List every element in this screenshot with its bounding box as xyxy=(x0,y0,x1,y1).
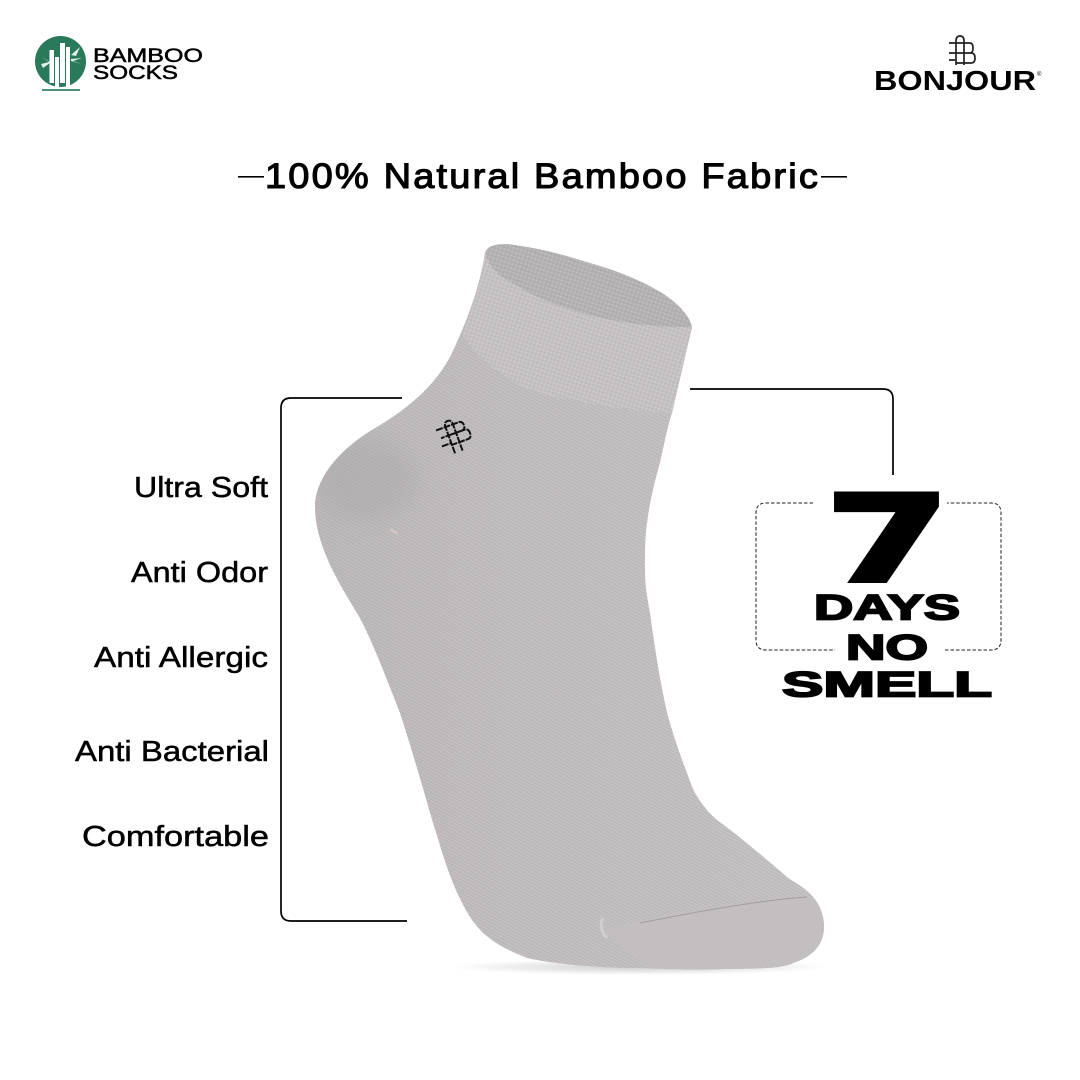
connector line xyxy=(690,389,893,475)
bracket: features xyxy=(281,398,407,921)
logo text: BAMBOO SOCKS: SOCKS xyxy=(93,63,178,84)
title: 100% Natural Bamboo Fabric xyxy=(265,157,820,196)
logo: bonjour xyxy=(874,36,1042,96)
logo text: BONJOUR: BONJOUR xyxy=(874,65,1036,96)
feature labels xyxy=(75,472,269,853)
sock logo xyxy=(434,415,475,457)
label: Comfortable: Comfortable xyxy=(82,821,269,853)
text: SMELL: SMELL xyxy=(782,666,992,704)
text: NO: NO xyxy=(846,628,928,668)
label: Anti Bacterial: Anti Bacterial xyxy=(75,736,269,768)
sock cuff inner xyxy=(485,244,692,327)
sock body xyxy=(315,253,824,970)
sock toe xyxy=(603,897,824,969)
sock heel shade xyxy=(321,446,409,514)
registered mark: ® xyxy=(1037,71,1042,78)
icon: bamboo circle xyxy=(35,36,86,91)
logo text: BAMBOO SOCKS: BAMBOO xyxy=(93,46,203,67)
label: Ultra Soft: Ultra Soft xyxy=(134,472,268,504)
icon: sock xyxy=(315,244,830,975)
numeral 7: 7 xyxy=(825,470,950,610)
label: Anti Allergic: Anti Allergic xyxy=(94,642,268,674)
sock heel seam xyxy=(390,529,398,534)
sock toe fold xyxy=(601,918,607,938)
callout: 7 days no smell xyxy=(756,470,1001,704)
sock toe seam xyxy=(640,897,807,923)
sock shadow xyxy=(450,959,830,975)
label: Anti Odor: Anti Odor xyxy=(131,557,268,589)
dashed frame xyxy=(756,503,1001,650)
sock cuff outer xyxy=(462,253,692,413)
icon: bonjour monogram xyxy=(949,36,975,65)
text: DAYS: DAYS xyxy=(814,588,960,628)
logo: bamboo socks xyxy=(35,36,203,91)
logo text: BAMBOO SOCKS xyxy=(93,46,203,84)
